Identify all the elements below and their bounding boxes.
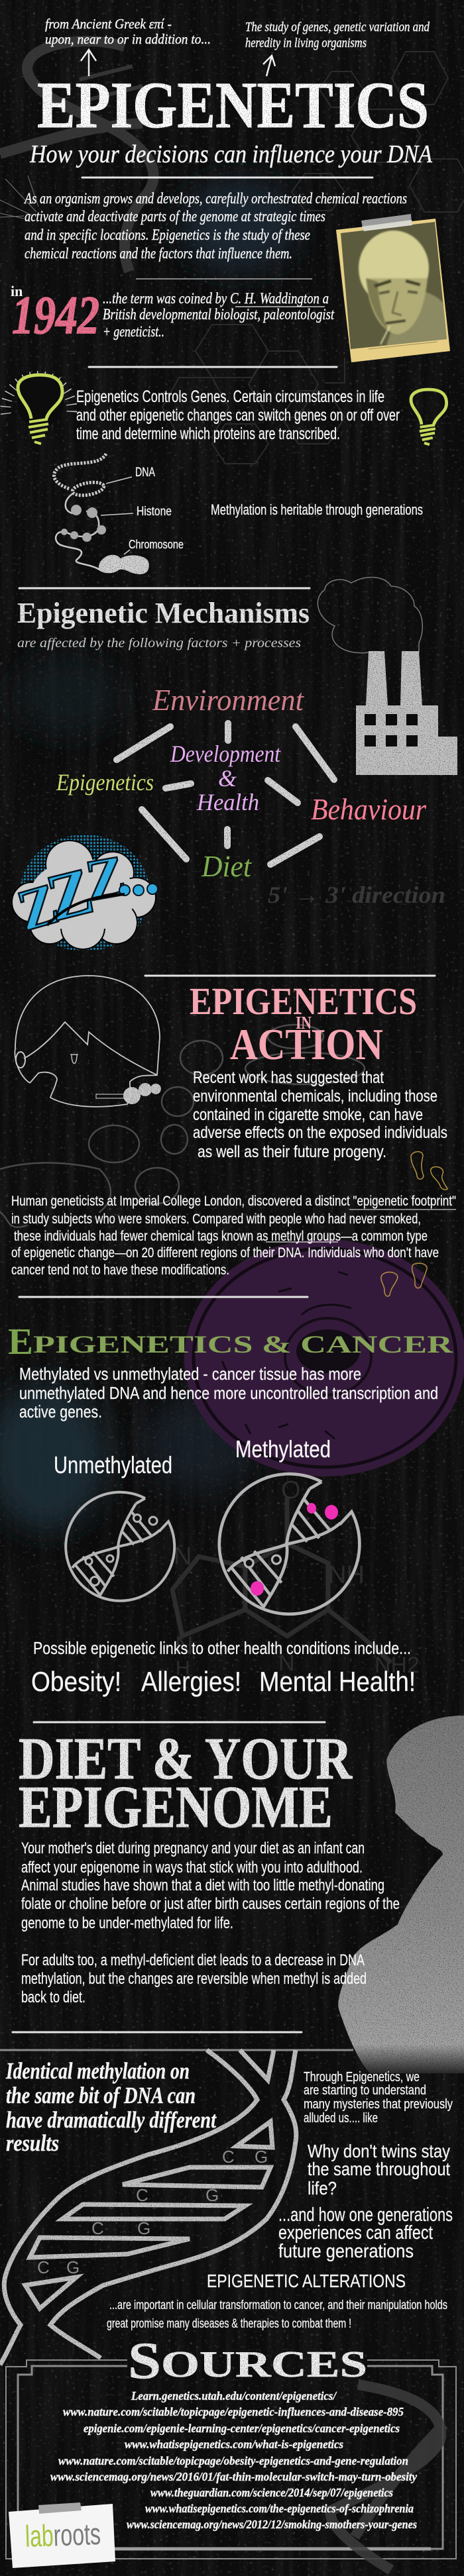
- background molecule: O: [281, 1476, 301, 1504]
- icon: ZZZ sleep cloud: [11, 835, 158, 951]
- intro paragraph: activate and deactivate parts of the genome at strategic times: [25, 208, 325, 225]
- diagram: mechanisms factors: Behaviour: [311, 792, 427, 826]
- list: sources: Learn.genetics.utah.edu/content/epigenetics/: [131, 2389, 337, 2402]
- diagram: mechanisms factors: Health: [196, 789, 259, 815]
- background DNA ribbon top: [0, 41, 154, 272]
- illustration: large DNA helix: C: [222, 2147, 235, 2167]
- list: sources: www.nature.com/scitable/topicpage/obesity-epigenetics-and-gene-regulation: [58, 2454, 408, 2467]
- intro paragraph: [23, 190, 407, 262]
- background smoke clouds: [0, 1025, 365, 1227]
- list: sources: www.whatisepigenetics.com/what-is-epigenetics: [125, 2438, 343, 2451]
- diagram: mechanisms factors: [56, 683, 427, 883]
- illustration: large DNA helix: [0, 2050, 296, 2365]
- text: conditions list: Allergies!: [141, 1666, 241, 1697]
- illustration: large DNA helix: G: [137, 2218, 150, 2238]
- illustration: large DNA helix: C: [37, 2257, 50, 2277]
- text: methylated vs unmethylated: active genes.: [19, 1402, 102, 1421]
- list: sources: [50, 2389, 418, 2531]
- Waddington text: [103, 290, 334, 340]
- illustration: large DNA helix: G: [255, 2147, 268, 2167]
- heading note: the study of genes: heredity in living organisms: [245, 36, 367, 50]
- text: conditions list: Obesity!: [31, 1666, 121, 1697]
- heading note: the study of genes: [245, 20, 430, 50]
- text: alterations note: [107, 2298, 447, 2331]
- background hexagon molecules: [162, 52, 464, 464]
- heading: diet and your epigenome: DIET & YOUR: [19, 1726, 353, 1792]
- text: diet paragraph two: back to diet.: [21, 1988, 86, 2006]
- list: sources: www.nature.com/scitable/topicpage/epigenetic-influences-and-disease-895: [63, 2405, 404, 2418]
- heading: epigenetics in action: [190, 980, 417, 1069]
- text: recent work: as well as their future progeny.: [198, 1143, 386, 1161]
- diagram: mechanisms factors: Environment: [152, 683, 304, 717]
- diagram: DNA to chromosome: [54, 454, 184, 574]
- faint note: 5 to 3 direction: 5' → 3' direction: [268, 882, 445, 908]
- arrow: epi: [81, 50, 96, 76]
- intro paragraph: chemical reactions and the factors that influence them.: [25, 245, 292, 262]
- list: sources: www.sciencemag.org/news/2016/01/fat-thin-molecular-switch-may-turn-obesity: [50, 2470, 418, 2483]
- heading: epigenetic alterations: EPIGENETIC ALTERATIONS: [207, 2271, 406, 2291]
- text: why twins: life?: [308, 2178, 337, 2198]
- logo note: labroots: labroots: [25, 2516, 101, 2553]
- background molecule: NH2: [375, 1653, 420, 1678]
- icon: ZZZ sleep cloud: Z: [11, 872, 66, 944]
- icon: footprints lower: [381, 1263, 427, 1296]
- text: diet paragraph one: genome to be under-methylated for life.: [21, 1914, 233, 1932]
- text: epigenetics controls genes: [76, 387, 400, 443]
- text: how one generation: future generations: [278, 2241, 414, 2262]
- list: sources: www.whatisepigenetics.com/the-epigenetics-of-schizophrenia: [145, 2502, 414, 2515]
- text: human geneticists: cancer tend not to have these modifications.: [11, 1262, 229, 1278]
- diagram: DNA to chromosome: DNA: [135, 466, 155, 480]
- background molecule: [172, 1476, 420, 1679]
- heading: epigenetics and cancer: [8, 1321, 454, 1363]
- text: identical methylation: have dramatically different: [6, 2107, 217, 2133]
- photo of C. H. Waddington: [336, 214, 453, 362]
- heading: sources: [128, 2332, 367, 2389]
- sources frame: [6, 2360, 456, 2559]
- illustration: large DNA helix: C: [136, 2185, 148, 2205]
- diagram: mechanisms factors: Epigenetics: [56, 769, 154, 796]
- background molecule: N: [174, 1543, 192, 1571]
- diagram: DNA to chromosome: Chromosone: [129, 538, 184, 551]
- arrow: genetics: [263, 56, 275, 76]
- icon: footprints upper: [411, 1152, 447, 1190]
- text: epigenetics controls genes: time and determine which proteins are transcribed.: [76, 425, 340, 443]
- silhouette: fetus: [338, 1716, 464, 2073]
- diagram: mechanisms factors: &: [218, 765, 237, 792]
- background molecule: N: [175, 1632, 193, 1660]
- Waddington text: + geneticist..: [103, 323, 164, 340]
- icon: ZZZ sleep cloud: Z: [81, 844, 131, 913]
- heading note: from Ancient Greek: upon, near to or in addition to...: [45, 31, 211, 47]
- icon: light bulb left: [5, 375, 72, 444]
- text: human geneticists: [11, 1194, 456, 1278]
- text: through epigenetics: are starting to understand: [304, 2083, 426, 2098]
- text: through epigenetics: [304, 2070, 453, 2126]
- heading note: from Ancient Greek: from Ancient Greek επί -: [45, 16, 172, 32]
- icon: factory with smoke: [318, 578, 457, 775]
- label: unmethylated: Unmethylated: [54, 1451, 172, 1478]
- text: recent work: Recent work has suggested that: [193, 1068, 384, 1087]
- label: methylated: Methylated: [235, 1435, 331, 1463]
- text: alterations note: great promise many diseases & therapies to combat them !: [107, 2317, 351, 2331]
- text: recent work: [193, 1068, 447, 1161]
- text: identical methylation: results: [6, 2130, 59, 2156]
- heading: sources: OURCES: [161, 2344, 367, 2385]
- heading: epigenetics in action: IN: [296, 1013, 312, 1033]
- diagram: mechanisms factors: Development: [170, 741, 281, 767]
- heading: sources: S: [128, 2332, 161, 2389]
- intro paragraph: and in specific locations. Epigenetics is the study of these: [25, 227, 310, 243]
- illustration: large DNA helix: G: [205, 2185, 219, 2205]
- list: sources: www.theguardian.com/science/2014/sep/07/epigenetics: [150, 2486, 393, 2499]
- diagram: unmethylated DNA circle: [66, 1492, 174, 1601]
- text: identical methylation: the same bit of DNA can: [6, 2083, 196, 2108]
- text: through epigenetics: alluded us.... like: [304, 2111, 378, 2126]
- illustration: large DNA helix: C: [91, 2218, 104, 2238]
- subheading: affected by factors: are affected by the following factors + processes: [17, 636, 301, 650]
- background molecule: H: [176, 1657, 190, 1679]
- heading note: from Ancient Greek: [45, 16, 211, 47]
- Waddington text: British developmental biologist, paleontologist: [103, 306, 334, 323]
- text: identical methylation: [5, 2058, 217, 2156]
- background DNA ribbon bottom right: [331, 2385, 444, 2570]
- logo note: labroots: [9, 2502, 115, 2568]
- heading: epigenetics and cancer: E: [8, 1321, 33, 1363]
- background molecule: NH: [328, 1561, 365, 1589]
- illustration: large DNA helix: G: [66, 2257, 80, 2277]
- heading note: the study of genes: The study of genes, genetic variation and: [245, 20, 430, 34]
- heading: epigenetics and cancer: PIGENETICS & CANCER: [33, 1331, 454, 1359]
- illustration: smoker head: [15, 976, 161, 1107]
- in 1942: in: [11, 283, 23, 299]
- text: methylated vs unmethylated: Methylated vs unmethylated - cancer tissue has more: [19, 1364, 361, 1384]
- diagram: mechanisms factors: Diet: [201, 849, 252, 883]
- text: diet paragraph one: affect your epigenome in ways that stick with you into adulthood.: [21, 1859, 363, 1877]
- in 1942: 1942: [12, 285, 99, 345]
- heading: epigenetic mechanisms: Epigenetic Mechanisms: [17, 597, 310, 629]
- heading: diet and your epigenome: EPIGENOME: [19, 1775, 333, 1840]
- heading: epigenetics in action: ACTION: [230, 1020, 383, 1069]
- text: methylated vs unmethylated: [19, 1364, 438, 1421]
- text: conditions list: [31, 1666, 416, 1697]
- diagram: methylated DNA circle: [219, 1474, 359, 1614]
- text: diet paragraph one: [21, 1839, 400, 1932]
- text: why twins: [308, 2141, 450, 2198]
- text: diet paragraph two: [21, 1951, 367, 2006]
- text: how one generation: [278, 2204, 453, 2262]
- list: sources: epigenie.com/epigenie-learning-center/epigenetics/cancer-epigenetics: [84, 2422, 400, 2435]
- diagram: DNA to chromosome: Histone: [137, 505, 172, 519]
- icon: ZZZ sleep cloud: Z: [40, 853, 100, 935]
- text: conditions list: Mental Health!: [259, 1666, 416, 1697]
- heading: epigenetics in action: EPIGENETICS: [190, 980, 417, 1023]
- background molecule: N: [278, 1651, 295, 1676]
- burst decoration: [0, 176, 38, 219]
- purple cell background: [184, 1239, 464, 1476]
- list: sources: www.sciencemag.org/news/2012/12/smoking-smothers-your-genes: [127, 2518, 417, 2531]
- text: identical methylation: Identical methylation on: [5, 2058, 190, 2084]
- icon: light bulb right: [411, 389, 447, 444]
- heading: diet and your epigenome: [19, 1726, 353, 1840]
- Waddington text: ...the term was coined by C. H. Waddington a: [103, 290, 329, 307]
- text: through epigenetics: Through Epigenetics, we: [304, 2070, 420, 2085]
